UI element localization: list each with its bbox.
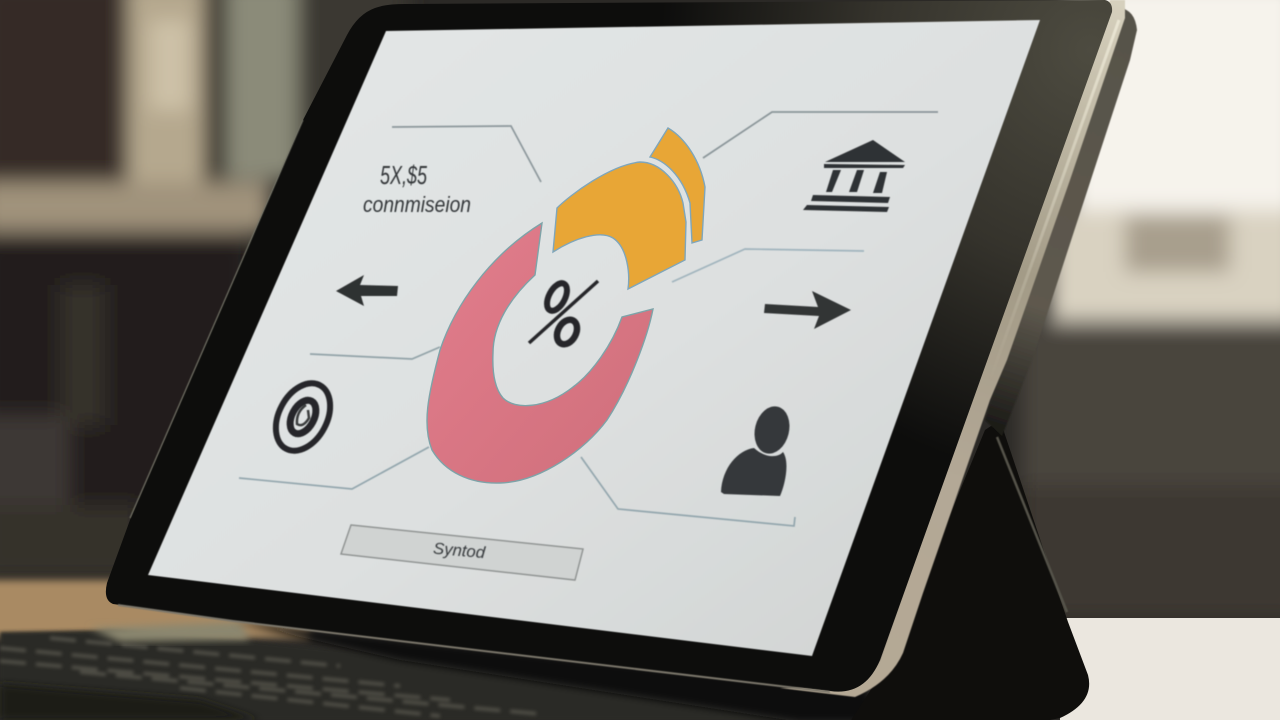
footer label box: Syntod bbox=[432, 539, 486, 562]
small orange segment bbox=[650, 128, 705, 243]
line: lower right bbox=[581, 457, 795, 526]
tablet kickstand bbox=[850, 420, 1089, 720]
commission heading: connmiseion bbox=[363, 192, 471, 217]
icon: right arrow bbox=[764, 291, 851, 329]
line: middle right bbox=[672, 249, 864, 282]
line: top left bbox=[392, 126, 541, 182]
tablet outer back band bbox=[985, 8, 1137, 436]
icon: target bbox=[265, 374, 341, 460]
large orange segment bbox=[553, 162, 686, 289]
tablet rim edge bbox=[780, 0, 1125, 697]
footer label box bbox=[341, 525, 583, 580]
icon: bank building bbox=[803, 140, 905, 212]
tablet bottom highlight bbox=[118, 605, 830, 692]
screen bbox=[148, 20, 1040, 656]
line: middle left bbox=[310, 347, 440, 359]
commission heading bbox=[363, 160, 471, 217]
tablet bezel bbox=[106, 0, 1112, 692]
keyboard bbox=[0, 622, 870, 720]
donut chart bbox=[427, 128, 705, 483]
chart connector lines bbox=[239, 112, 938, 526]
rim highlight bbox=[990, 20, 1119, 380]
percent symbol bbox=[529, 280, 598, 348]
icon: person bbox=[721, 403, 794, 496]
line: top right bbox=[703, 112, 938, 158]
pink segment bbox=[427, 223, 653, 483]
tablet left edge highlight bbox=[130, 120, 303, 518]
commission heading: 5X,$5 bbox=[380, 160, 427, 190]
line: lower left bbox=[239, 447, 429, 489]
tablet body bbox=[106, 0, 1137, 697]
icon: left arrow bbox=[336, 275, 398, 306]
